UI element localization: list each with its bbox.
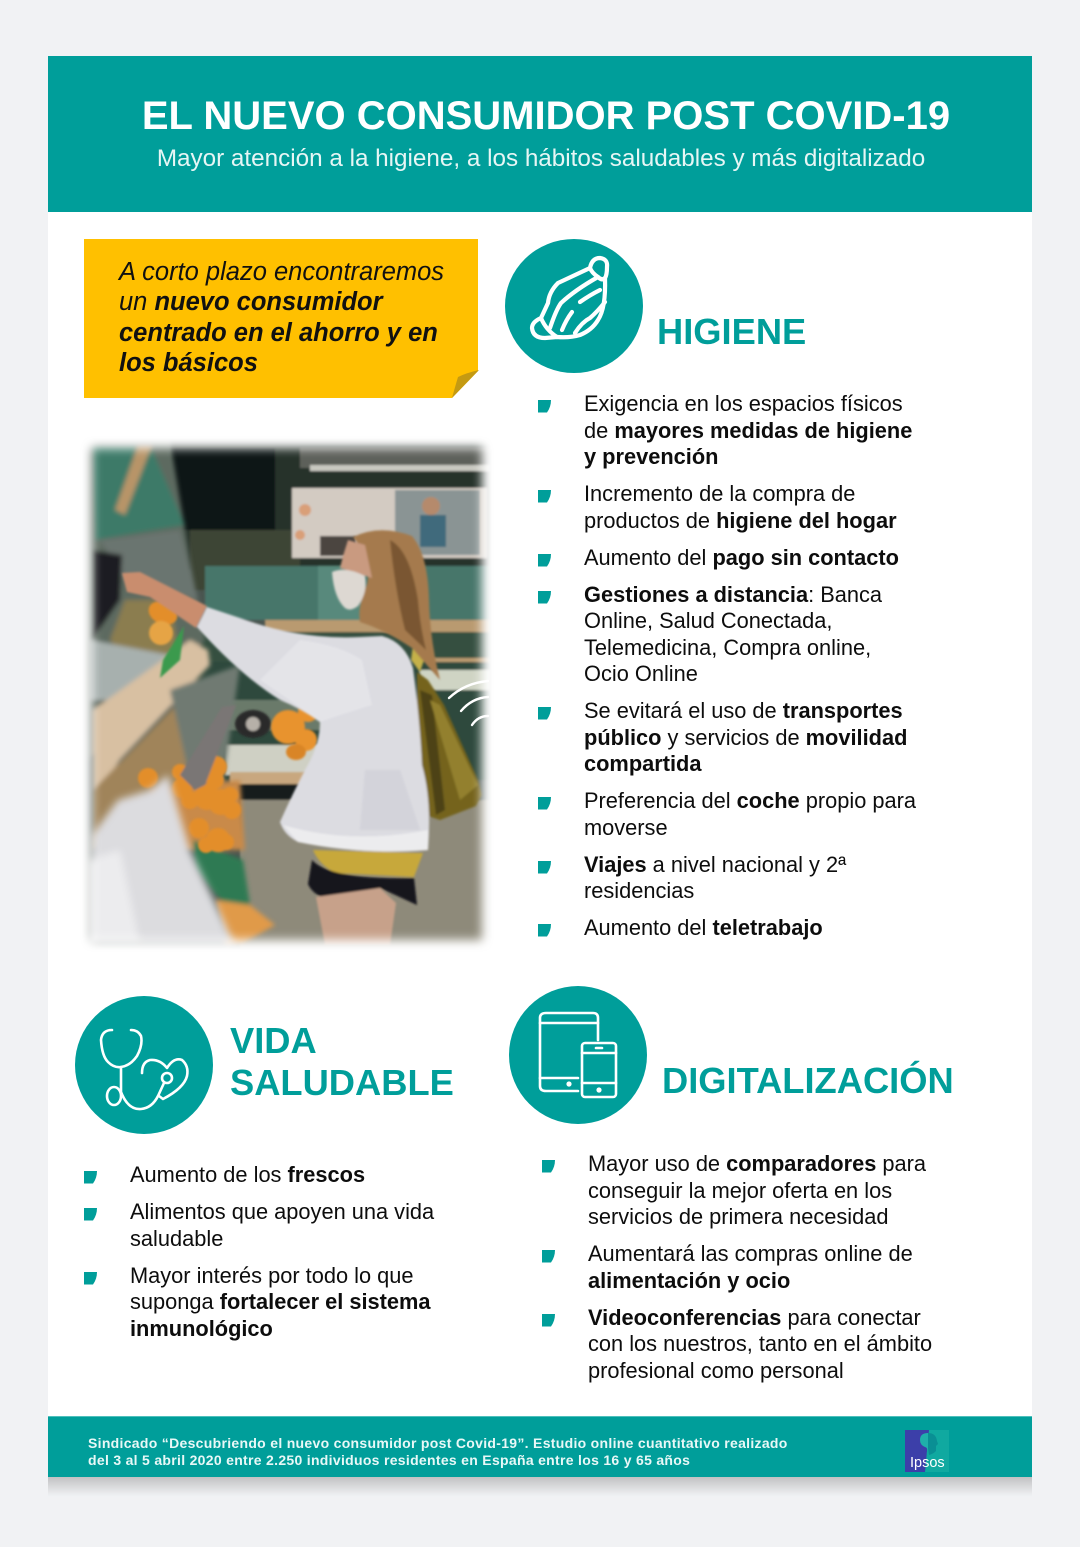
bullet 2	[542, 1241, 913, 1292]
yellow top	[313, 850, 423, 877]
bag	[417, 672, 482, 820]
bullet 1	[538, 391, 912, 469]
oranges	[138, 597, 241, 853]
bullet 1: conseguir la mejor oferta en los	[588, 1178, 892, 1202]
bullet 3: Mayor interés por todo lo que	[130, 1262, 414, 1288]
bullet 2: saludable	[130, 1226, 223, 1250]
bullet 3	[84, 1262, 431, 1340]
bullet 3: suponga fortalecer el sistema	[130, 1289, 431, 1314]
heading: VIDA SALUDABLE: SALUDABLE	[230, 1062, 454, 1103]
heading: VIDA SALUDABLE: VIDA	[230, 1020, 317, 1061]
bullet 1: Mayor uso de comparadores para	[588, 1151, 926, 1176]
source note: del 3 al 5 abril 2020 entre 2.250 individuos residentes en España entre los 16 y 65 años	[88, 1452, 690, 1468]
list: vida saludable bullets	[84, 1162, 434, 1340]
source note	[88, 1435, 788, 1468]
bullet 2: productos de higiene del hogar	[584, 508, 897, 532]
bullet 3: con los nuestros, tanto en el ámbito	[588, 1331, 932, 1356]
icon: face mask in circle	[505, 239, 643, 373]
foreground white bag	[88, 775, 235, 945]
bullet 4	[538, 582, 882, 686]
source note: Sindicado “Descubriendo el nuevo consumidor post Covid-19”. Estudio online cuantitativo realizado	[88, 1435, 788, 1451]
bullet 1: y prevención	[584, 444, 718, 469]
callout text: centrado en el ahorro y en	[119, 318, 438, 346]
logo: Ipsos	[905, 1430, 949, 1472]
bullet 1: Exigencia en los espacios físicos	[584, 391, 903, 416]
icon: stethoscope and heart in circle	[75, 996, 213, 1134]
bullet 2: Alimentos que apoyen una vida	[130, 1199, 434, 1224]
bullet 6: moverse	[584, 814, 668, 840]
subtitle: Mayor atención a la higiene, a los hábitos saludables y más digitalizado	[157, 145, 925, 172]
bullet 3: Videoconferencias para conectar	[588, 1304, 921, 1330]
icon: tablet and phone in circle	[509, 986, 647, 1124]
face mask	[332, 570, 366, 610]
bullet 1: servicios de primera necesidad	[588, 1204, 888, 1229]
price board	[180, 705, 236, 790]
bullet 1	[542, 1151, 926, 1229]
bullet 3: profesional como personal	[588, 1358, 844, 1382]
bullet 1: Aumento de los frescos	[130, 1162, 365, 1187]
bullet 4: Online, Salud Conectada,	[584, 608, 832, 633]
bullet 2	[84, 1199, 434, 1250]
bullet 4: Ocio Online	[584, 661, 698, 686]
panel: higiene	[505, 239, 916, 940]
heading: DIGITALIZACIÓN: DIGITALIZACIÓN	[662, 1060, 954, 1101]
sweater	[197, 607, 429, 852]
panel: digitalización	[509, 986, 954, 1382]
callout text: los básicos	[119, 349, 258, 377]
photo: shopper with mask choosing oranges	[84, 440, 490, 948]
sheet bottom shadow	[48, 1477, 1032, 1497]
bullet 7: Viajes a nivel nacional y 2ª	[584, 852, 846, 876]
legs	[316, 888, 396, 945]
list: higiene bullets	[538, 391, 916, 940]
bullet 2	[538, 481, 897, 532]
callout text: un nuevo consumidor	[119, 288, 383, 316]
person	[122, 530, 482, 945]
bullet 7: residencias	[584, 878, 694, 903]
panel: vida saludable	[75, 996, 454, 1340]
bullet 2: Incremento de la compra de	[584, 481, 855, 506]
bullet 3	[542, 1304, 932, 1382]
carried oranges	[271, 702, 318, 760]
wifi-like white arcs	[449, 681, 488, 725]
heading: HIGIENE: HIGIENE	[657, 311, 806, 352]
bullet 3: inmunológico	[130, 1316, 273, 1340]
callout: yellow sticky note	[84, 239, 479, 398]
callout text: A corto plazo encontraremos	[119, 258, 444, 286]
face	[340, 540, 372, 578]
hair behind	[353, 530, 440, 680]
left produce shelf	[85, 440, 275, 945]
heading: VIDA SALUDABLE	[230, 1020, 454, 1103]
callout text	[118, 258, 444, 377]
bullet 4: Gestiones a distancia: Banca	[584, 582, 882, 606]
bullet 7	[538, 852, 846, 903]
footer banner	[48, 1416, 1032, 1477]
bullet 5	[538, 698, 907, 776]
list: digitalización bullets	[542, 1151, 932, 1382]
bullet 5: público y servicios de movilidad	[584, 724, 907, 750]
bullet 1: de mayores medidas de higiene	[584, 418, 912, 442]
arm skin	[122, 572, 207, 628]
note shape with folded corner	[84, 239, 479, 398]
bullet 2: alimentación y ocio	[588, 1268, 790, 1292]
bullet 5: compartida	[584, 751, 702, 776]
bullet 6	[538, 788, 916, 840]
bullet 5: Se evitará el uso de transportes	[584, 698, 903, 723]
bullet 4: Telemedicina, Compra online,	[584, 634, 871, 660]
bullet 6: Preferencia del coche propio para	[584, 788, 916, 813]
bullet 8: Aumento del teletrabajo	[584, 915, 823, 940]
logo: Ipsos: Ipsos	[910, 1455, 945, 1471]
bullet 2: Aumentará las compras online de	[588, 1241, 913, 1266]
title: EL NUEVO CONSUMIDOR POST COVID-19	[142, 94, 950, 138]
shorts	[308, 860, 417, 905]
bullet 3: Aumento del pago sin contacto	[584, 544, 899, 570]
header banner	[48, 56, 1032, 212]
